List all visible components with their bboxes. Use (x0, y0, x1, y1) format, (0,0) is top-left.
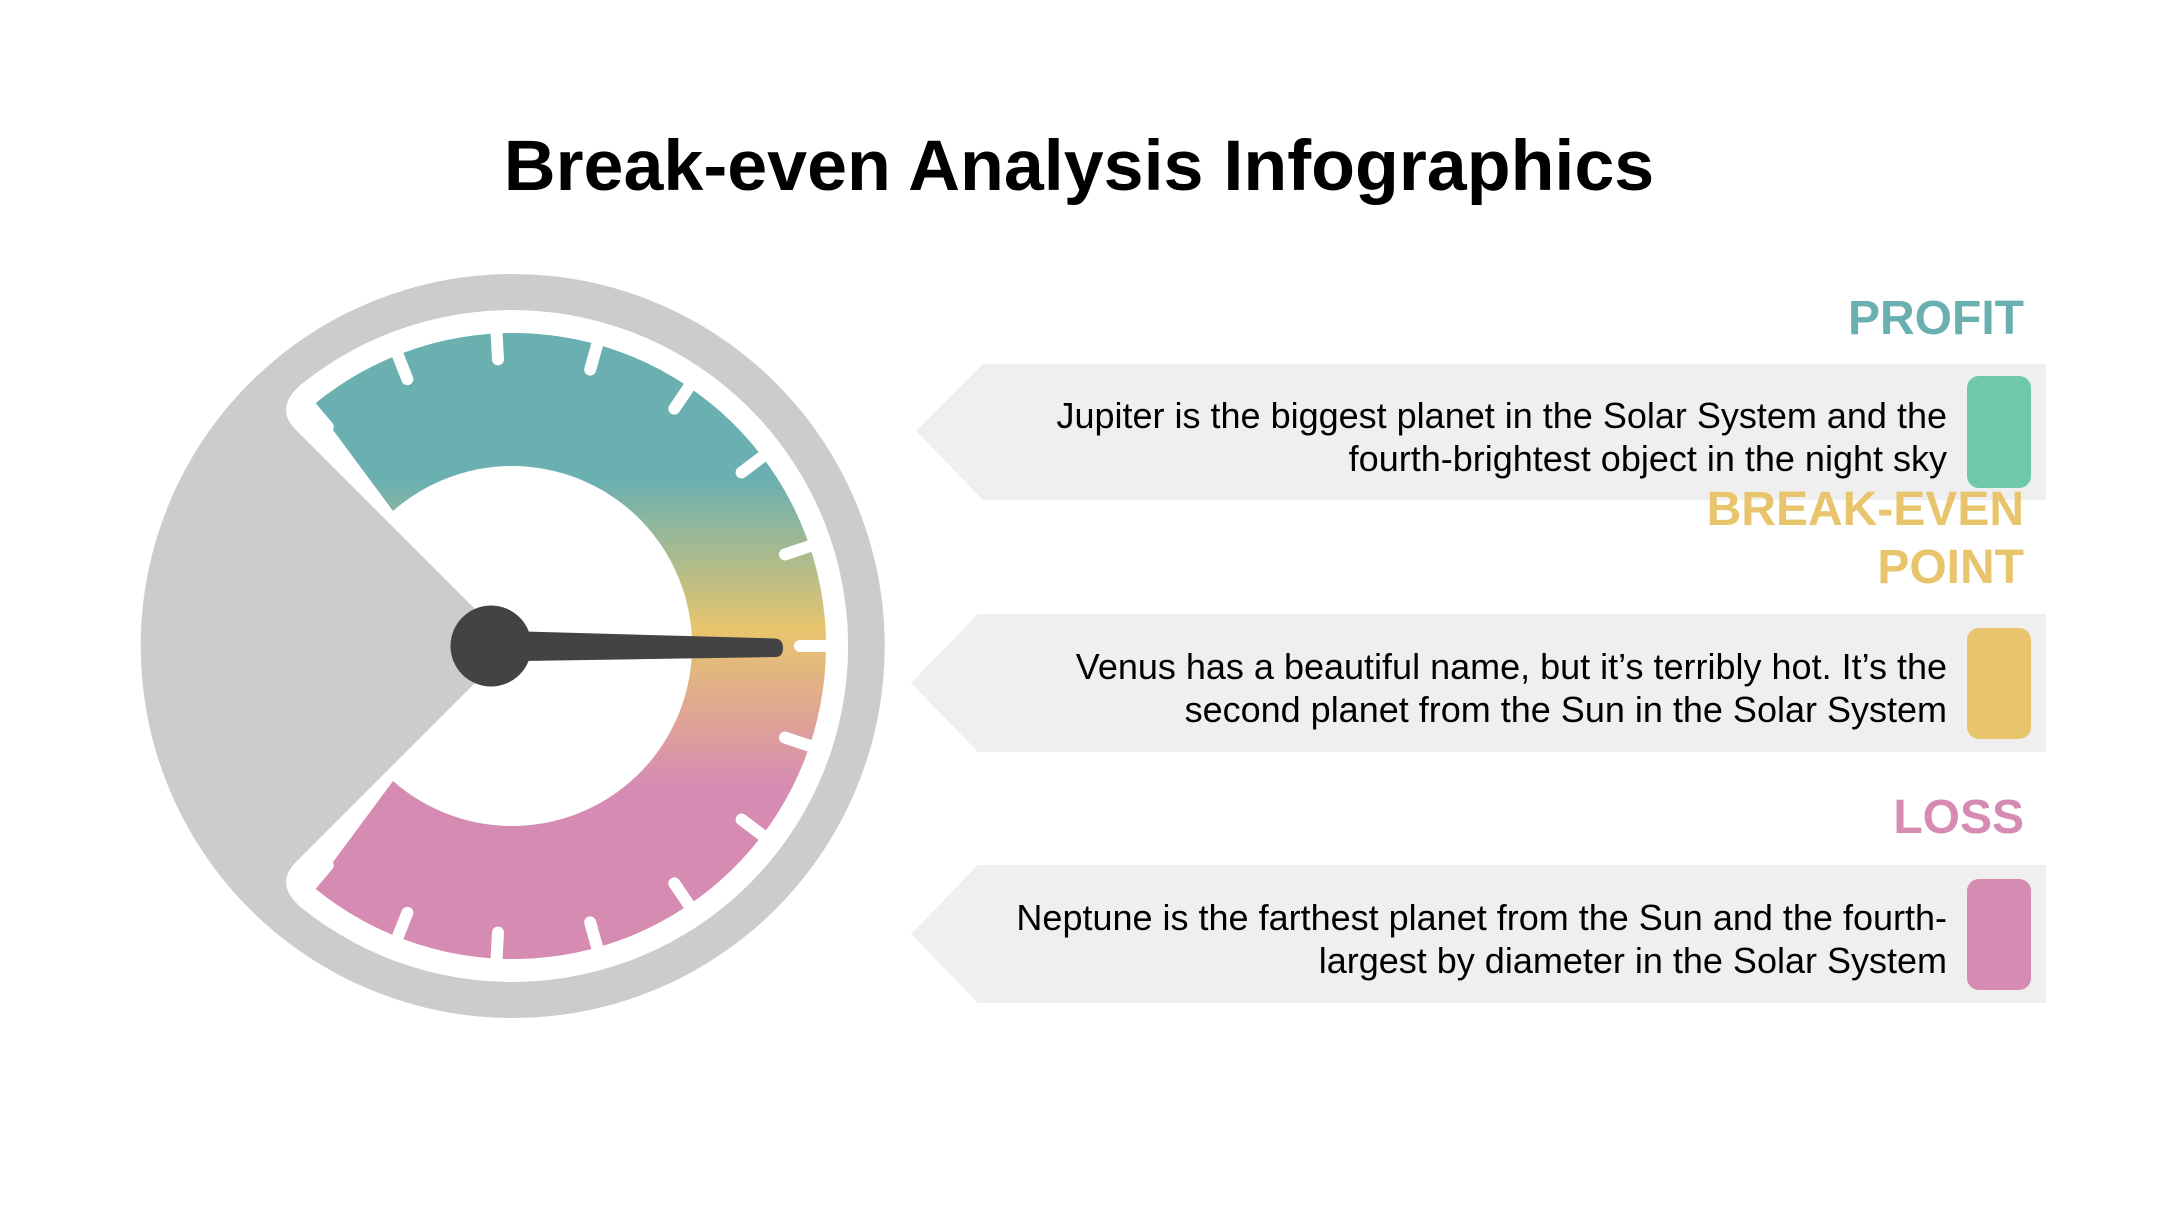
gauge (141, 274, 885, 1018)
gauge needle (450, 606, 783, 686)
gauge outer disc (141, 274, 885, 1018)
panel: loss (911, 791, 2046, 1003)
gauge white face (286, 310, 848, 982)
profit colour swatch (1967, 376, 2031, 488)
gauge gradient band (314, 333, 826, 959)
loss arrow box (911, 865, 2046, 1003)
profit text: Jupiter is the biggest planet in the Solar System and the (1056, 395, 1947, 436)
break-even text: Venus has a beautiful name, but it’s terribly hot. It’s the (1076, 646, 1947, 687)
title: Break-even Analysis Infographics (504, 126, 1654, 206)
break-even heading: BREAK-EVEN (1707, 483, 2024, 536)
profit heading: PROFIT (1848, 292, 2024, 345)
gauge tick marks (308, 328, 831, 964)
profit arrow box (916, 364, 2046, 500)
panel: break-even point (911, 483, 2046, 752)
loss text: Neptune is the farthest planet from the Sun and the fourth- (1016, 897, 1947, 938)
loss text: largest by diameter in the Solar System (1319, 940, 1947, 981)
break-even arrow box (911, 614, 2046, 752)
loss heading: LOSS (1893, 791, 2024, 844)
panel: profit (916, 292, 2046, 500)
loss colour swatch (1967, 879, 2031, 990)
break-even heading: POINT (1877, 541, 2024, 594)
profit text: fourth-brightest object in the night sky (1349, 438, 1947, 479)
break-even colour swatch (1967, 628, 2031, 739)
break-even text: second planet from the Sun in the Solar System (1185, 689, 1947, 730)
